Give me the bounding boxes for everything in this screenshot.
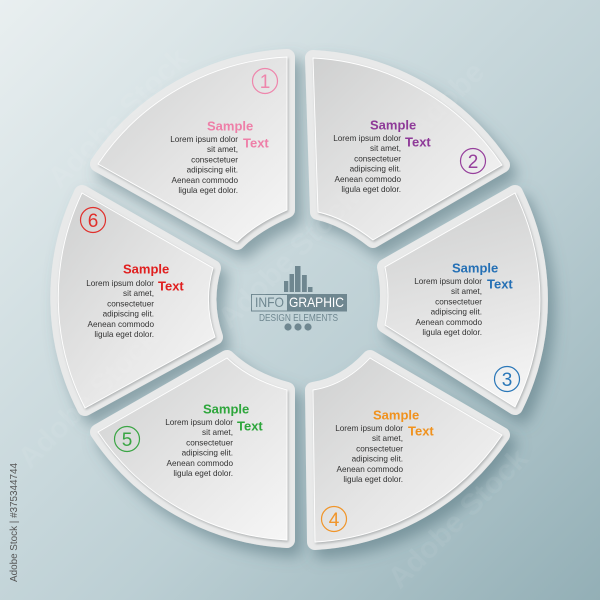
text 3 (414, 277, 482, 337)
text 4: adipiscing elit. (352, 455, 403, 464)
segment 3 (385, 193, 540, 407)
heading 3: Text (487, 276, 513, 292)
text 6: Aenean commodo (88, 320, 154, 329)
text 1: Aenean commodo (172, 176, 238, 185)
text 6: sit amet, (123, 289, 154, 298)
stock id caption: Adobe Stock | #375344744 (8, 463, 20, 582)
number 5 (114, 426, 140, 452)
text 1: ligula eget dolor. (178, 186, 238, 195)
watermarks: Adobe (402, 56, 491, 145)
text 3: sit amet, (451, 287, 482, 296)
text 5: Aenean commodo (167, 459, 233, 468)
heading 6: Text (158, 278, 184, 294)
heading 5: Text (237, 418, 263, 434)
heading 6 (123, 262, 184, 294)
number 4 (322, 506, 346, 532)
logo box: INFO (255, 294, 284, 310)
text 3: Lorem ipsum dolor (414, 277, 482, 286)
heading 4: Sample (373, 408, 419, 422)
text 5: adipiscing elit. (182, 449, 233, 458)
number 4: 4 (329, 510, 340, 531)
text 3: Aenean commodo (416, 318, 482, 327)
heading 1 (207, 118, 269, 150)
text 3: adipiscing elit. (431, 308, 482, 317)
heading 4 (373, 408, 434, 438)
text 6: adipiscing elit. (103, 310, 154, 319)
heading 2 (370, 118, 431, 150)
text 5: consectetuer (186, 438, 233, 447)
heading 1: Text (243, 136, 269, 150)
text 2: Lorem ipsum dolor (333, 134, 401, 143)
heading 2: Sample (370, 118, 416, 132)
heading 3: Sample (452, 260, 498, 276)
number 6 (80, 208, 106, 232)
text 2: sit amet, (370, 144, 401, 153)
text 1: Lorem ipsum dolor (170, 135, 238, 144)
text 5: Lorem ipsum dolor (165, 418, 233, 427)
text 5: sit amet, (202, 428, 233, 437)
text 2 (333, 134, 401, 194)
segment 2 (313, 58, 502, 240)
logo box (252, 294, 347, 312)
text 3: ligula eget dolor. (422, 328, 482, 337)
text 2: consectetuer (354, 154, 401, 163)
dots (284, 323, 312, 331)
heading 1: Sample (207, 118, 253, 134)
text 6: Lorem ipsum dolor (86, 279, 154, 288)
text 4: ligula eget dolor. (343, 475, 403, 484)
segment 4 (313, 358, 502, 542)
text 6: ligula eget dolor. (94, 330, 154, 339)
watermarks: Adobe Stock (42, 42, 195, 195)
watermarks: Adobe Stock (12, 322, 165, 475)
text 5 (165, 418, 233, 478)
text 6 (86, 279, 154, 339)
number 1 (252, 68, 278, 94)
text 6: consectetuer (107, 299, 154, 308)
subtitle: DESIGN ELEMENTS (259, 312, 338, 324)
text 1: adipiscing elit. (187, 166, 238, 175)
number 1: 1 (260, 72, 270, 93)
text 2: ligula eget dolor. (341, 185, 401, 194)
text 4: Lorem ipsum dolor (335, 424, 403, 433)
text 2: adipiscing elit. (350, 165, 401, 174)
text 4: Aenean commodo (337, 465, 403, 474)
center logo (252, 266, 347, 331)
text 5: ligula eget dolor. (173, 469, 233, 478)
text 3: consectetuer (435, 297, 482, 306)
heading 6: Sample (123, 262, 169, 276)
text 4: sit amet, (372, 434, 403, 443)
heading 4: Text (408, 424, 434, 438)
segment 1 (98, 57, 287, 242)
text 4 (335, 424, 403, 484)
heading 5: Sample (203, 402, 249, 416)
text 1: sit amet, (207, 145, 238, 154)
number 2 (460, 148, 486, 174)
number 5: 5 (122, 430, 132, 451)
number 6: 6 (88, 211, 98, 232)
heading 2: Text (405, 134, 431, 150)
text 1 (170, 135, 238, 195)
number 2: 2 (468, 152, 478, 173)
watermarks: Adobe Stock (212, 182, 365, 335)
text 1: consectetuer (191, 155, 238, 164)
number 3: 3 (502, 370, 512, 391)
segment 5 (98, 358, 287, 540)
text 4: consectetuer (356, 444, 403, 453)
icon: bar chart (284, 266, 312, 292)
number 3 (494, 366, 520, 392)
logo box: GRAPHIC (289, 294, 344, 310)
segment 6 (58, 193, 215, 408)
heading 3 (452, 260, 513, 292)
text 2: Aenean commodo (335, 175, 401, 184)
heading 5 (203, 402, 263, 434)
watermarks: Adobe Stock (382, 442, 535, 595)
